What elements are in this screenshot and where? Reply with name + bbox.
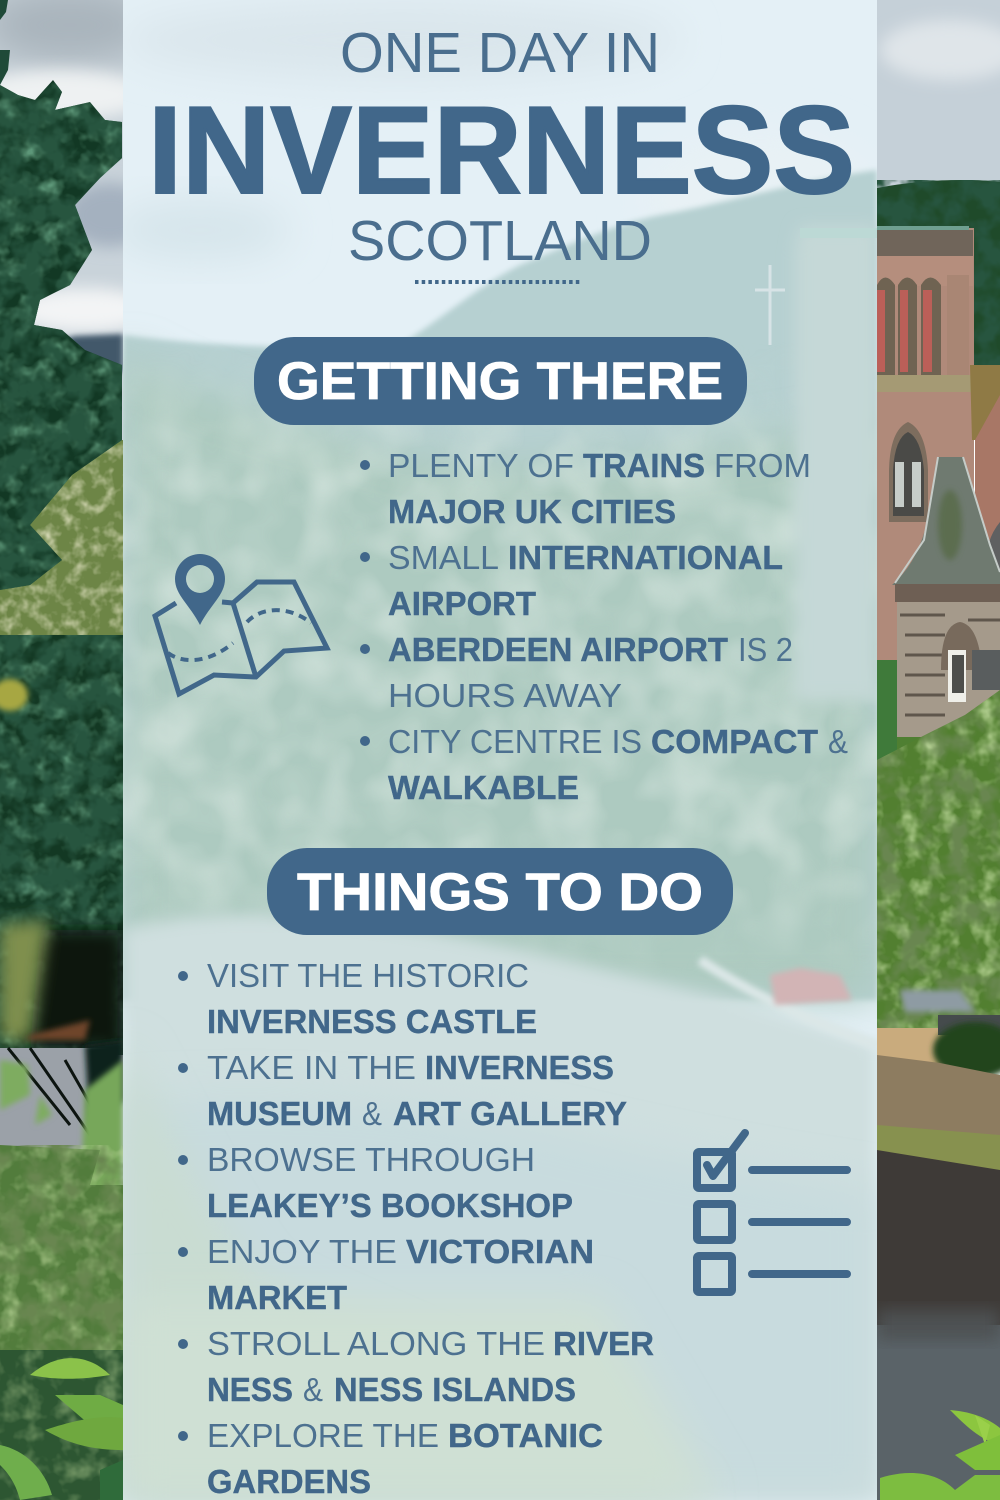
list: getting there: AIRPORT bbox=[388, 585, 536, 622]
list: things to do: RIVER bbox=[553, 1325, 654, 1362]
list: getting there: ABERDEEN AIRPORT bbox=[388, 631, 728, 668]
dotted divider bbox=[415, 280, 580, 284]
list: getting there: MAJOR UK CITIES bbox=[388, 493, 676, 530]
list: things to do: MARKET bbox=[207, 1279, 347, 1316]
list: getting there bbox=[360, 447, 848, 806]
list: things to do: BOTANIC bbox=[448, 1417, 603, 1454]
title block bbox=[148, 21, 855, 282]
list: getting there: HOURS AWAY bbox=[388, 677, 622, 714]
list: things to do: ENJOY THE bbox=[207, 1233, 397, 1270]
list: getting there: COMPACT bbox=[651, 723, 818, 760]
list: getting there: IS 2 bbox=[738, 631, 793, 668]
section pill: things to do: THINGS TO DO bbox=[297, 863, 703, 922]
list: things to do: VISIT THE HISTORIC bbox=[207, 957, 529, 994]
background photo: right side hill, church and river bbox=[877, 0, 1000, 1500]
list: things to do bbox=[178, 957, 654, 1500]
list: getting there: PLENTY OF bbox=[388, 447, 574, 484]
list: getting there: FROM bbox=[714, 447, 811, 484]
list: getting there: & bbox=[828, 723, 848, 760]
list: things to do: NESS ISLANDS bbox=[334, 1371, 576, 1408]
list: getting there: WALKABLE bbox=[388, 769, 579, 806]
list: things to do: & bbox=[362, 1095, 382, 1132]
list: things to do: EXPLORE THE bbox=[207, 1417, 439, 1454]
list: getting there: SMALL bbox=[388, 539, 499, 576]
title line: one day in: ONE DAY IN bbox=[340, 21, 660, 85]
list: things to do: BROWSE THROUGH bbox=[207, 1141, 535, 1178]
background photo: left side sky and pine trees bbox=[0, 0, 123, 1500]
riverside tree bbox=[877, 690, 1000, 1030]
list: things to do: VICTORIAN bbox=[406, 1233, 594, 1270]
list: things to do: & bbox=[303, 1371, 323, 1408]
icon: checklist bbox=[697, 1133, 847, 1292]
list: getting there: TRAINS bbox=[583, 447, 705, 484]
list: things to do: NESS bbox=[207, 1371, 293, 1408]
title line: Scotland: SCOTLAND bbox=[348, 209, 652, 273]
translucent panel with hazy photo behind bbox=[110, 0, 880, 1500]
list: getting there: CITY CENTRE IS bbox=[388, 723, 642, 760]
list: things to do: MUSEUM bbox=[207, 1095, 352, 1132]
title line: Inverness: INVERNESS bbox=[148, 82, 855, 220]
list: things to do: INVERNESS CASTLE bbox=[207, 1003, 537, 1040]
list: things to do: ART GALLERY bbox=[393, 1095, 627, 1132]
list: things to do: LEAKEY’S BOOKSHOP bbox=[207, 1187, 573, 1224]
list: things to do: GARDENS bbox=[207, 1463, 371, 1500]
list: getting there: INTERNATIONAL bbox=[508, 539, 783, 576]
list: things to do: INVERNESS bbox=[425, 1049, 614, 1086]
section pill: getting there bbox=[254, 337, 747, 425]
church tower bbox=[877, 226, 974, 708]
list: things to do: STROLL ALONG THE bbox=[207, 1325, 545, 1362]
list: things to do: TAKE IN THE bbox=[207, 1049, 416, 1086]
turret roof bbox=[892, 457, 1000, 585]
icon: folded map with location pin bbox=[155, 554, 327, 694]
section pill: things to do bbox=[267, 848, 733, 935]
section pill: getting there: GETTING THERE bbox=[277, 352, 723, 411]
